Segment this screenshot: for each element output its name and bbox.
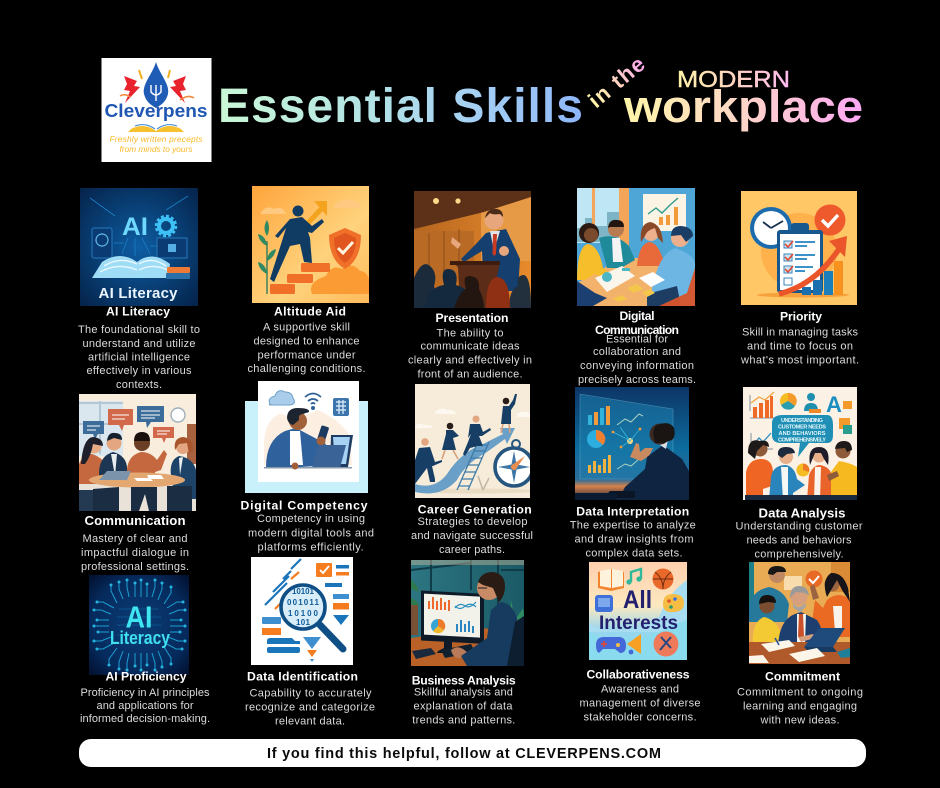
text block: stakeholder concerns. xyxy=(584,712,696,724)
text block: what's most important. xyxy=(740,354,859,366)
image: magnifier over binary data: 001011 xyxy=(287,598,320,607)
panel: Presentation xyxy=(408,191,532,380)
text block: Skill in managing tasks xyxy=(742,326,858,338)
text block: Essential for xyxy=(606,334,668,346)
text block: precisely across teams. xyxy=(578,374,696,386)
text block xyxy=(736,520,863,560)
title: workplace xyxy=(623,81,863,132)
text block: management of diverse xyxy=(580,698,700,710)
title: MODERN xyxy=(677,66,790,92)
image: analyst at data wall xyxy=(575,387,689,500)
text block xyxy=(580,684,700,724)
image: AI chip circuit xyxy=(89,575,189,675)
panel: Collaborativeness xyxy=(580,562,700,724)
image: AI chip circuit: AI xyxy=(126,600,152,634)
panel: Data Interpretation xyxy=(570,387,696,560)
text block: platforms efficiently. xyxy=(258,542,364,554)
heading: Data Analysis xyxy=(758,506,846,520)
text block: understand and utilize xyxy=(82,338,196,350)
image: AI Literacy book: AI xyxy=(122,213,148,241)
text block: effectively in various xyxy=(86,365,192,377)
image: magnifier over binary data: 10101 xyxy=(292,587,315,596)
text block: needs and behaviors xyxy=(746,534,852,546)
heading: Career Generation xyxy=(418,502,532,516)
image: team reviewing work xyxy=(749,562,850,664)
text block: recognize and categorize xyxy=(245,702,375,714)
panel: Digital Competency xyxy=(240,381,374,554)
heading xyxy=(595,309,679,337)
heading: Collaborativeness xyxy=(586,668,690,682)
heading: Altitude Aid xyxy=(274,304,346,318)
text block: performance under xyxy=(258,350,356,362)
logo: Cleverpens: from minds to yours xyxy=(120,144,193,154)
text block: complex data sets. xyxy=(586,548,682,560)
text block: A supportive skill xyxy=(263,322,350,334)
heading: Digital Competency xyxy=(240,498,368,512)
text block: designed to enhance xyxy=(254,336,360,348)
text block: trends and patterns. xyxy=(412,714,515,726)
image: man with phone and laptop xyxy=(245,381,368,493)
title xyxy=(218,51,863,133)
panel: Communication xyxy=(79,394,196,573)
image: figure climbing steps xyxy=(252,186,369,303)
image: AI Literacy book: AI Literacy xyxy=(98,285,178,302)
text block: and applications for xyxy=(96,700,194,712)
image: customers and speech bubble: AND BEHAVIORS xyxy=(778,431,826,437)
text block xyxy=(570,520,696,560)
image: All Interests xyxy=(589,562,687,660)
text block xyxy=(578,334,696,386)
text block: explanation of data xyxy=(414,700,513,712)
image: AI chip circuit: Literacy xyxy=(110,628,170,648)
title: Essential Skills xyxy=(218,80,583,133)
heading: Communication xyxy=(595,323,679,337)
text block: front of an audience. xyxy=(418,368,522,380)
image: magnifier over binary data: 10100 xyxy=(288,609,319,618)
image: customers and speech bubble xyxy=(743,387,857,500)
text block: The foundational skill to xyxy=(78,324,200,336)
image: customers and speech bubble: CUSTOMER NEEDS xyxy=(778,424,826,430)
footer call to action xyxy=(79,739,866,767)
panel: Career Generation xyxy=(411,384,535,556)
text block: with new ideas. xyxy=(760,714,840,726)
text block: professional settings. xyxy=(81,561,189,573)
heading: Commitment xyxy=(765,670,840,684)
panel: Altitude Aid xyxy=(248,186,369,375)
text block xyxy=(740,326,859,366)
image: magnifier over binary data: 101 xyxy=(296,618,311,627)
heading: Business Analysis xyxy=(412,674,516,688)
text block: impactful dialogue in xyxy=(81,547,189,559)
text block xyxy=(248,322,366,375)
panel: Priority xyxy=(740,191,859,366)
panel: Commitment xyxy=(737,562,863,726)
text block xyxy=(78,324,200,391)
panel: Digital Communication xyxy=(577,188,696,386)
heading: Data Identification xyxy=(247,670,358,684)
heading: Priority xyxy=(780,310,822,324)
text block: Capability to accurately xyxy=(250,688,372,700)
text block: modern digital tools and xyxy=(248,528,374,540)
image: customers and speech bubble: COMPREHENSIVELY xyxy=(778,438,826,444)
panel: Business Analysis xyxy=(411,560,524,726)
text block xyxy=(412,686,515,726)
text block xyxy=(411,516,533,556)
text block xyxy=(80,687,210,725)
image: team around a table xyxy=(577,188,695,306)
text block: clearly and effectively in xyxy=(408,354,532,366)
heading: Data Interpretation xyxy=(576,504,689,518)
image: clock and checklist xyxy=(741,191,857,305)
image: analyst at monitor xyxy=(411,560,524,666)
image: magnifier over binary data xyxy=(251,557,353,665)
image: All Interests: Interests xyxy=(599,613,678,634)
text block: and time to focus on xyxy=(747,340,853,352)
text block: learning and engaging xyxy=(743,700,857,712)
text block xyxy=(737,686,863,726)
logo: Cleverpens xyxy=(102,58,212,162)
text block xyxy=(245,688,375,728)
text block: Awareness and xyxy=(601,684,679,696)
image: customers and speech bubble: UNDERSTANDING xyxy=(781,418,823,424)
text block: Understanding customer xyxy=(736,520,863,532)
logo: Cleverpens: Freshly written precepts xyxy=(110,134,203,144)
text block: The expertise to analyze xyxy=(570,520,696,532)
panel: AI Proficiency xyxy=(80,575,210,725)
panel: Data Identification xyxy=(245,557,375,728)
panel: AI Literacy xyxy=(78,188,200,391)
text block: The ability to xyxy=(436,328,504,340)
text block: Mastery of clear and xyxy=(82,533,188,545)
text block: contexts. xyxy=(116,379,162,391)
text block: relevant data. xyxy=(275,716,345,728)
text block: Competency in using xyxy=(257,513,365,525)
footer call to action: If you find this helpful, follow at CLEVERPENS.COM xyxy=(267,746,661,762)
heading: Communication xyxy=(84,513,186,528)
text block xyxy=(81,533,189,573)
text block: and draw insights from xyxy=(574,534,694,546)
text block: communicate ideas xyxy=(420,340,520,352)
text block: conveying information xyxy=(580,360,694,372)
image: speaker at podium xyxy=(414,191,531,308)
text block: Strategies to develop xyxy=(418,516,528,528)
image: All Interests: All xyxy=(623,586,652,614)
image: customers and speech bubble: A xyxy=(826,392,842,417)
text block: challenging conditions. xyxy=(248,363,366,375)
text block xyxy=(408,328,532,380)
text block: Commitment to ongoing xyxy=(737,686,863,698)
text block: and navigate successful xyxy=(411,530,533,542)
text block: comprehensively. xyxy=(754,548,844,560)
heading: AI Proficiency xyxy=(106,670,187,684)
image: AI Literacy book xyxy=(80,188,198,306)
title: in the xyxy=(583,51,650,113)
image: people climbing to a compass xyxy=(415,384,530,498)
text block: career paths. xyxy=(439,544,505,556)
logo: Cleverpens: Cleverpens xyxy=(104,100,208,121)
heading: Digital xyxy=(620,309,654,323)
text block: Skillful analysis and xyxy=(414,686,513,698)
text block: Proficiency in AI principles xyxy=(80,687,210,699)
panel: Data Analysis xyxy=(736,387,863,560)
image: meeting with speech bubbles xyxy=(79,394,196,511)
heading: AI Literacy xyxy=(106,304,170,318)
text block: artificial intelligence xyxy=(88,352,190,364)
heading: Presentation xyxy=(436,311,508,325)
text block: collaboration and xyxy=(593,346,681,358)
text block: informed decision-making. xyxy=(80,713,210,725)
text block xyxy=(248,513,374,554)
